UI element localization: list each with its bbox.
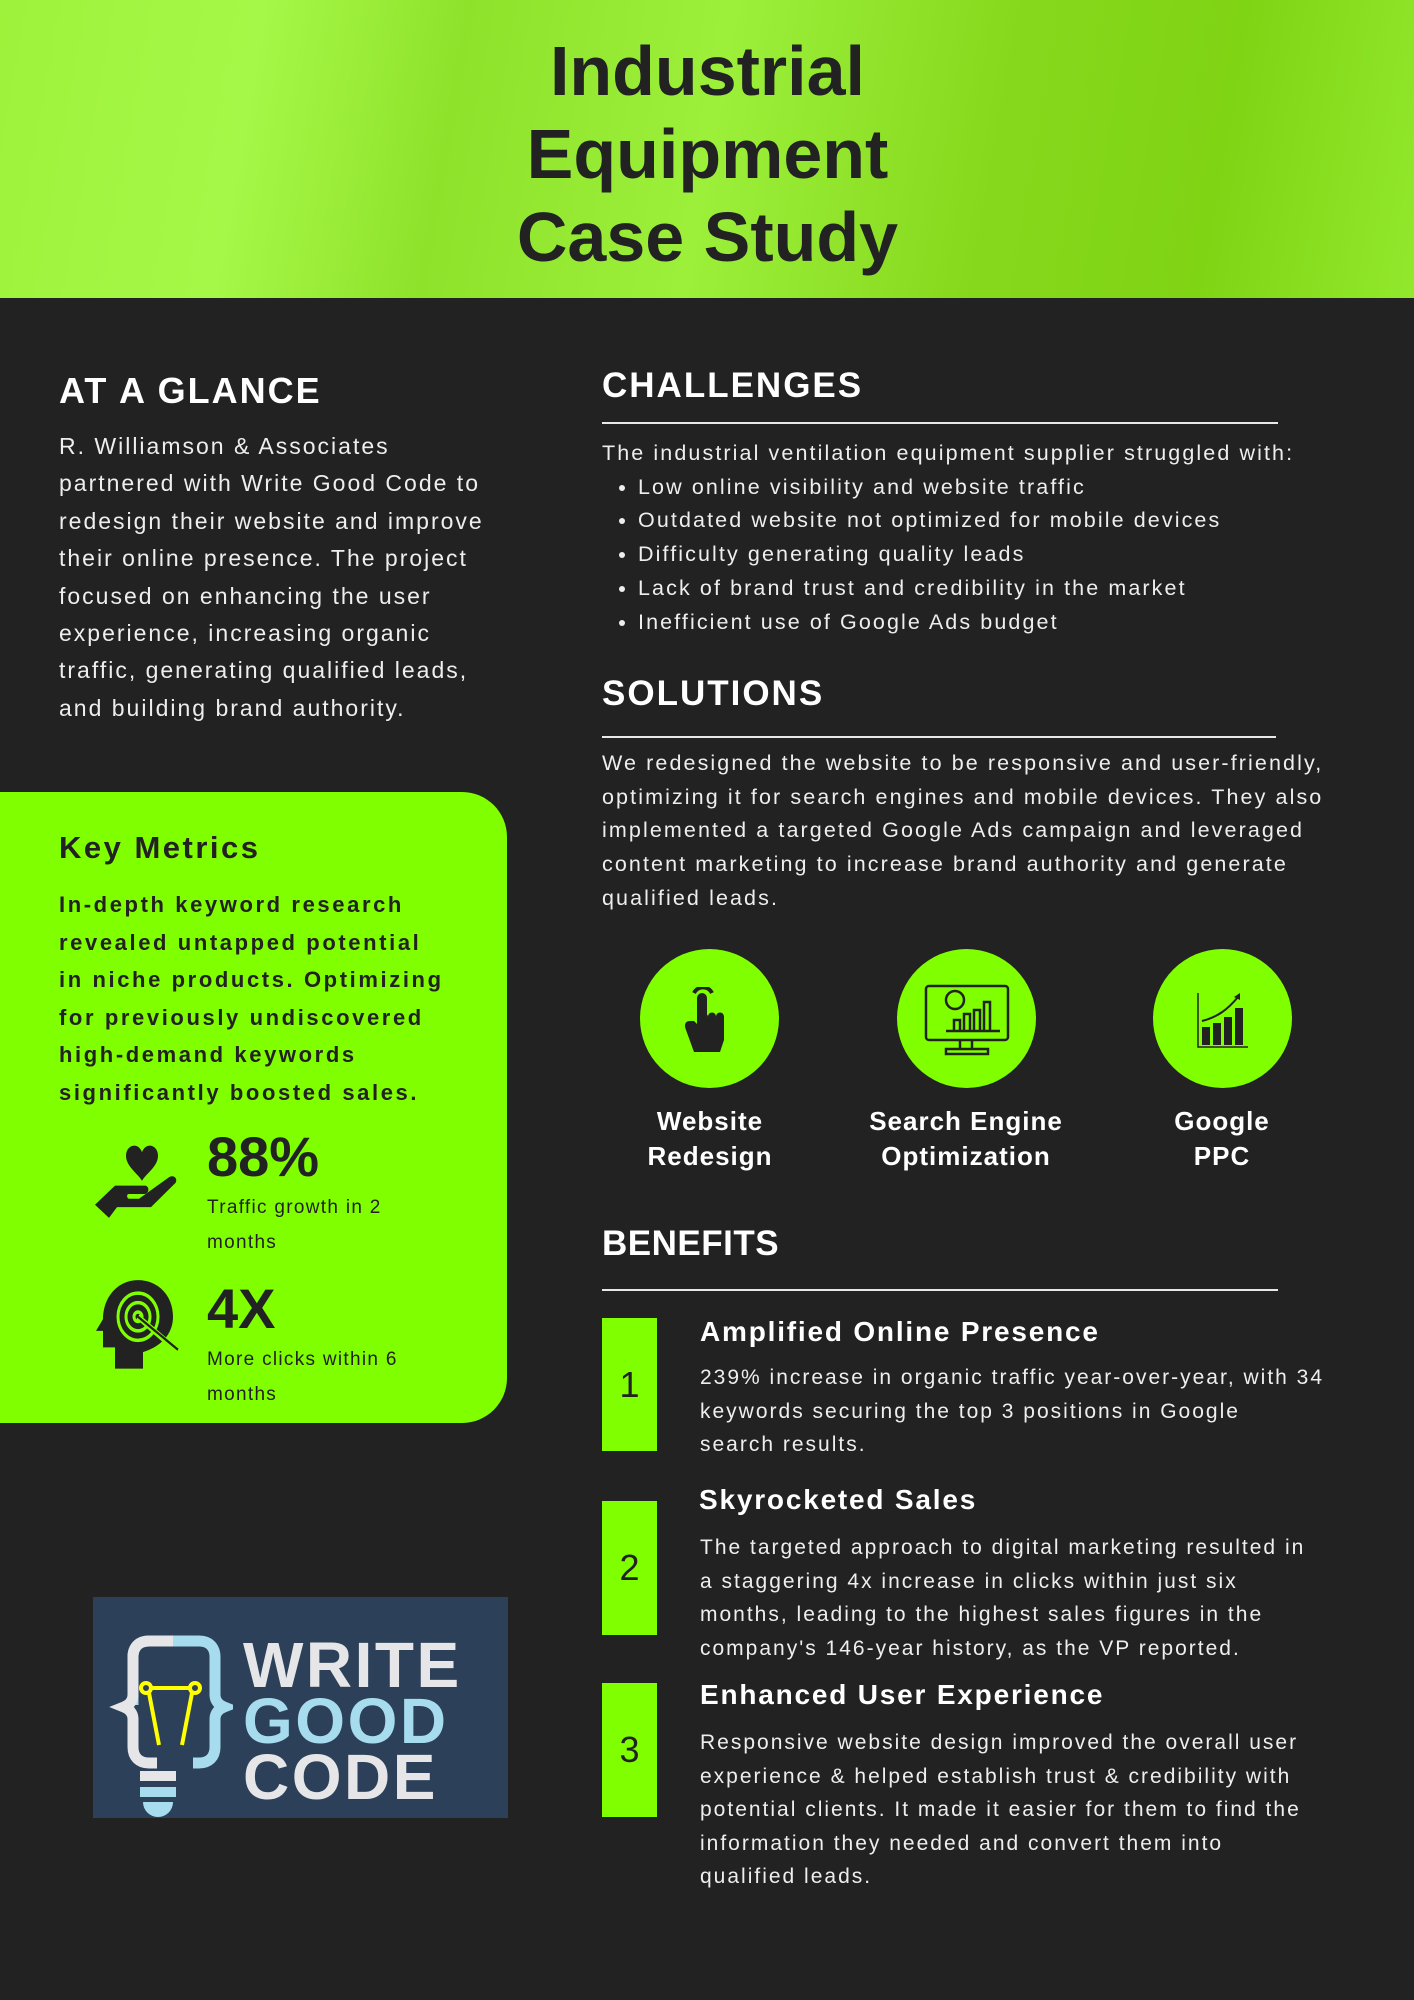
benefit text 2: months, leading to the highest sales figures in the <box>700 1603 1263 1626</box>
label: website redesign: Redesign <box>647 1141 773 1171</box>
text: challenges list: Inefficient use of Google Ads budget <box>638 610 1059 634</box>
benefit text 3: information they needed and convert them into <box>700 1832 1223 1854</box>
stat: 4X: months <box>207 1384 277 1405</box>
number box 1 <box>602 1318 657 1451</box>
number box 3: 3 <box>619 1729 640 1770</box>
logo: write good code <box>93 1597 508 1818</box>
logo text: WRITE <box>243 1629 462 1701</box>
number box 2 <box>602 1501 657 1635</box>
text: glance: partnered with Write Good Code to <box>59 470 480 496</box>
label: google ppc <box>1174 1106 1270 1171</box>
label: search engine optimization <box>869 1106 1063 1171</box>
benefit text 1 <box>700 1366 1324 1456</box>
text: solutions: optimizing it for search engines and mobile devices. They also <box>602 785 1323 809</box>
text: glance: R. Williamson & Associates <box>59 433 390 459</box>
text: glance <box>59 433 484 721</box>
label: search engine optimization: Optimization <box>881 1141 1051 1171</box>
benefit text 2: company's 146-year history, as the VP reported. <box>700 1636 1241 1660</box>
logo text: CODE <box>243 1741 438 1813</box>
benefit 3 <box>602 1679 1301 1888</box>
number box 2: 2 <box>619 1547 640 1588</box>
text: metrics description: for previously undiscovered <box>59 1004 424 1030</box>
text: challenges list: Low online visibility and website traffic <box>638 475 1086 499</box>
text: challenges list: Difficulty generating quality leads <box>638 542 1025 566</box>
stat: 4X: 4X <box>207 1277 276 1340</box>
text: solutions <box>602 751 1323 910</box>
title: Industrial <box>550 32 865 110</box>
logo text: GOOD <box>243 1685 449 1757</box>
label: website redesign <box>647 1106 773 1171</box>
text: metrics description: significantly boosted sales. <box>59 1080 419 1104</box>
benefit 2 <box>602 1484 1305 1660</box>
label: google ppc: Google <box>1174 1106 1270 1136</box>
stat: 88%: months <box>207 1232 277 1253</box>
heading: solutions: SOLUTIONS <box>602 674 824 713</box>
number box 3 <box>602 1683 657 1817</box>
header banner <box>0 0 1414 298</box>
benefit heading 1: Amplified Online Presence <box>700 1316 1100 1347</box>
label: search engine optimization: Search Engine <box>869 1106 1063 1136</box>
benefit text 3: Responsive website design improved the overall user <box>700 1731 1298 1754</box>
text: metrics description: In-depth keyword research <box>59 892 404 917</box>
stat: 4X <box>207 1277 398 1405</box>
benefit text 1: 239% increase in organic traffic year-over-year, with 34 <box>700 1366 1324 1389</box>
text: solutions: implemented a targeted Google Ads campaign and leveraged <box>602 818 1304 842</box>
text: metrics description: high-demand keywords <box>59 1042 357 1067</box>
benefit text 3: qualified leads. <box>700 1865 872 1888</box>
label: website redesign: Website <box>657 1106 763 1136</box>
heading: challenges: CHALLENGES <box>602 366 863 405</box>
label: google ppc: PPC <box>1194 1141 1250 1171</box>
benefit text 3: experience & helped establish trust & credibility with <box>700 1764 1291 1788</box>
text: solutions: We redesigned the website to be responsive and user-friendly, <box>602 751 1323 775</box>
icon: search engine optimization <box>897 949 1036 1088</box>
title: Case Study <box>517 198 898 276</box>
benefit heading 3: Enhanced User Experience <box>700 1679 1104 1710</box>
title <box>517 32 898 276</box>
heading: key metrics: Key Metrics <box>59 830 261 865</box>
text: challenges list: The industrial ventilation equipment supplier struggled with: <box>602 441 1294 465</box>
title: Equipment <box>527 115 888 193</box>
text: glance: traffic, generating qualified leads, <box>59 657 468 683</box>
benefit text 3: potential clients. It made it easier for them to find the <box>700 1798 1301 1821</box>
benefit 1 <box>602 1316 1324 1456</box>
heading: at a glance: AT A GLANCE <box>59 370 322 411</box>
text: challenges list <box>602 441 1294 634</box>
stat: 88%: 88% <box>207 1125 319 1188</box>
number box 1: 1 <box>619 1364 640 1405</box>
benefit text 2: a staggering 4x increase in clicks within just six <box>700 1570 1238 1592</box>
text: challenges list: Outdated website not optimized for mobile devices <box>638 508 1221 532</box>
text: solutions: content marketing to increase brand authority and generate <box>602 852 1288 876</box>
text: glance: redesign their website and improve <box>59 508 484 534</box>
text: glance: focused on enhancing the user <box>59 583 432 609</box>
text: glance: their online presence. The project <box>59 545 468 571</box>
text: challenges list: Lack of brand trust and credibility in the market <box>638 576 1187 600</box>
logo text <box>243 1629 462 1813</box>
stat: 88%: Traffic growth in 2 <box>207 1197 382 1218</box>
benefit text 1: keywords securing the top 3 positions in Google <box>700 1400 1240 1422</box>
icon: google ppc <box>1153 949 1292 1088</box>
benefit text 1: search results. <box>700 1433 867 1456</box>
text: glance: and building brand authority. <box>59 695 406 721</box>
heading: benefits: BENEFITS <box>602 1224 779 1263</box>
panel: key metrics <box>0 792 507 1423</box>
benefit text 3 <box>700 1731 1301 1888</box>
text: glance: experience, increasing organic <box>59 620 431 646</box>
icon: head with target <box>96 1280 178 1369</box>
stat: 4X: More clicks within 6 <box>207 1349 398 1370</box>
text: metrics description: revealed untapped potential <box>59 930 421 954</box>
text: metrics description: in niche products. Optimizing <box>59 967 444 992</box>
text: solutions: qualified leads. <box>602 886 779 910</box>
benefit heading 2: Skyrocketed Sales <box>699 1484 977 1515</box>
icon: website redesign <box>640 949 779 1088</box>
benefit text 2: The targeted approach to digital marketing resulted in <box>700 1536 1305 1559</box>
benefit text 2 <box>700 1536 1305 1660</box>
icon: heart in hand <box>95 1146 176 1218</box>
text: metrics description <box>59 892 444 1104</box>
stat: 88% <box>207 1125 382 1253</box>
